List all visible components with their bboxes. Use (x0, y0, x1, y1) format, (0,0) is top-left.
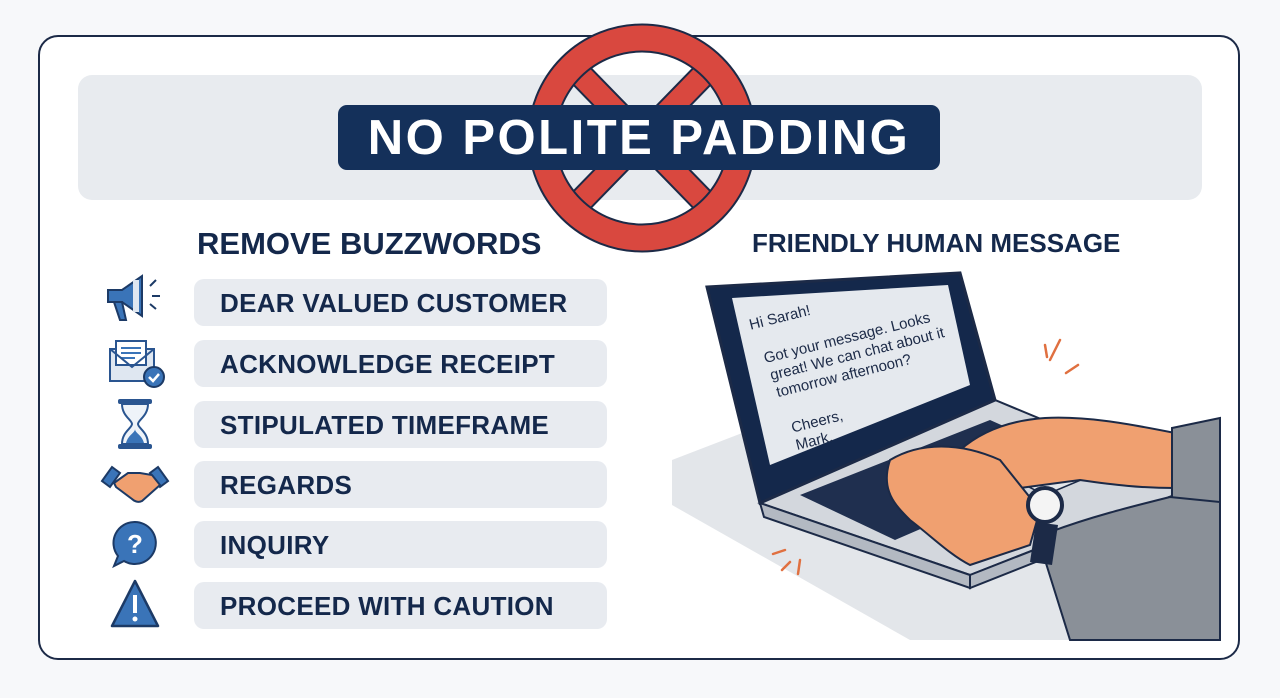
illustration: laptop with hands: Mark. (794, 428, 835, 454)
icon: envelope with check (109, 340, 165, 388)
watch (1028, 488, 1062, 522)
hands (960, 418, 1175, 488)
title band (78, 75, 1202, 200)
row: inquiry (194, 521, 607, 568)
row: dear valued customer: DEAR VALUED CUSTOMER (220, 288, 567, 318)
icon: hourglass (118, 399, 152, 449)
row: stipulated timeframe: STIPULATED TIMEFRAME (220, 410, 549, 440)
illustration: laptop with hands: Cheers, (790, 407, 845, 436)
icon: prohibition sign (532, 24, 752, 252)
icon: question bubble: ? (127, 529, 143, 559)
row: dear valued customer (194, 279, 607, 326)
laptop deck (760, 400, 1200, 575)
illustration: laptop with hands: Got your message. Looks (762, 309, 932, 367)
icon: warning triangle (110, 580, 160, 628)
shadow (672, 430, 1220, 640)
row: regards: REGARDS (220, 470, 352, 500)
heading: remove buzzwords: REMOVE BUZZWORDS (197, 226, 541, 261)
row: stipulated timeframe (194, 401, 607, 448)
illustration: laptop with hands (672, 271, 1221, 641)
icon: question bubble (112, 521, 157, 568)
icon: megaphone (107, 274, 160, 321)
keyboard (800, 420, 1080, 540)
motion marks (773, 340, 1078, 574)
icon: handshake (100, 466, 170, 503)
row: regards (194, 461, 607, 508)
heading: friendly human message: FRIENDLY HUMAN MESSAGE (752, 228, 1120, 258)
title: NO POLITE PADDING (368, 111, 910, 165)
screen (707, 273, 995, 503)
buzzword list (194, 279, 607, 629)
sleeves (1172, 418, 1220, 513)
message text: Hi Sarah! (748, 302, 812, 334)
illustration: laptop with hands: tomorrow afternoon? (775, 351, 913, 401)
row: acknowledge receipt: ACKNOWLEDGE RECEIPT (220, 349, 555, 379)
row: inquiry: INQUIRY (220, 530, 329, 560)
row: proceed with caution (194, 582, 607, 629)
row: proceed with caution: PROCEED WITH CAUTION (220, 591, 554, 621)
illustration: laptop with hands: great! We can chat about it (768, 324, 947, 384)
row: acknowledge receipt (194, 340, 607, 387)
